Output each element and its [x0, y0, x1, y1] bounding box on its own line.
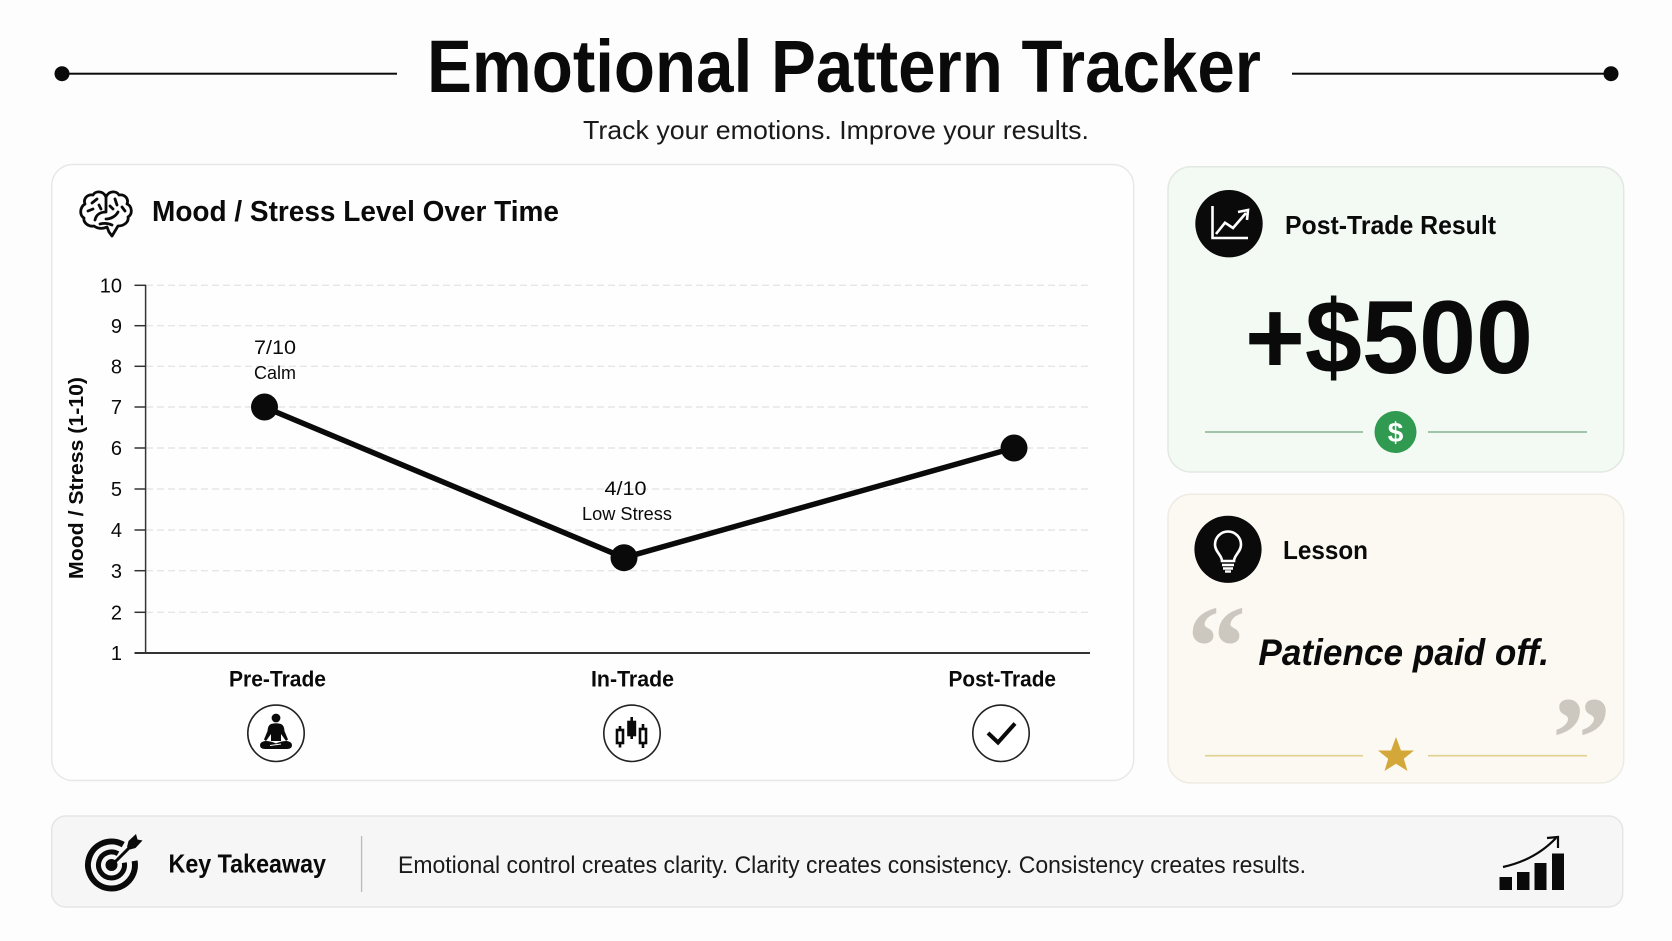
result value: +$500: [1245, 280, 1533, 396]
lesson heading: Lesson: [1283, 535, 1368, 565]
icon: growth bars with arrow: [1500, 837, 1564, 890]
closing quote mark: ”: [1552, 673, 1611, 804]
opening quote mark: “: [1187, 581, 1246, 712]
icon: rising chart badge: [1195, 190, 1263, 257]
lesson quote: Patience paid off.: [1258, 632, 1549, 673]
line chart: 1: [111, 643, 122, 665]
line chart: [100, 276, 1090, 665]
icon: brain: [81, 192, 131, 236]
icon: meditating person: [248, 705, 304, 762]
x axis labels: Post-Trade: [948, 667, 1056, 692]
panel: key takeaway: [52, 816, 1623, 907]
line chart: 2: [111, 602, 122, 624]
line chart: 9: [111, 316, 122, 338]
result heading: Post-Trade Result: [1285, 210, 1496, 240]
line chart: Low Stress: [582, 504, 672, 524]
line chart: 5: [111, 479, 122, 501]
panel: post-trade result: [1168, 167, 1624, 472]
divider with dollar coin: $: [1388, 417, 1404, 448]
line chart: 7/10: [254, 338, 296, 359]
line chart: 4/10: [604, 479, 646, 500]
line chart: Calm: [254, 363, 296, 383]
divider with dollar coin: [1205, 411, 1587, 453]
line chart: 10: [100, 276, 122, 298]
panel: lesson: [1168, 494, 1624, 804]
icon: target with arrow: [88, 834, 142, 888]
y axis label: Mood / Stress (1-10): [66, 377, 88, 579]
line chart: 4: [111, 520, 122, 542]
header decoration: right line: [1292, 66, 1618, 81]
icon: check mark: [973, 705, 1029, 762]
takeaway text: Emotional control creates clarity. Clarity creates consistency. Consistency creates results.: [398, 852, 1306, 879]
line chart: 6: [111, 438, 122, 460]
x axis labels: [229, 667, 1056, 692]
line chart: 7: [111, 397, 122, 419]
panel: mood chart: [52, 164, 1134, 780]
header decoration: left line: [54, 66, 397, 81]
icon: light bulb badge: [1194, 516, 1262, 583]
line chart: 3: [111, 561, 122, 583]
x axis labels: In-Trade: [591, 667, 674, 692]
subtitle: Track your emotions. Improve your results.: [583, 115, 1089, 145]
chart heading: Mood / Stress Level Over Time: [152, 196, 559, 228]
title: Emotional Pattern Tracker: [427, 25, 1261, 108]
icon: candlesticks: [604, 705, 660, 762]
takeaway heading: Key Takeaway: [168, 849, 326, 879]
divider with star: [1205, 737, 1587, 771]
line chart: 8: [111, 356, 122, 378]
x axis labels: Pre-Trade: [229, 667, 326, 692]
